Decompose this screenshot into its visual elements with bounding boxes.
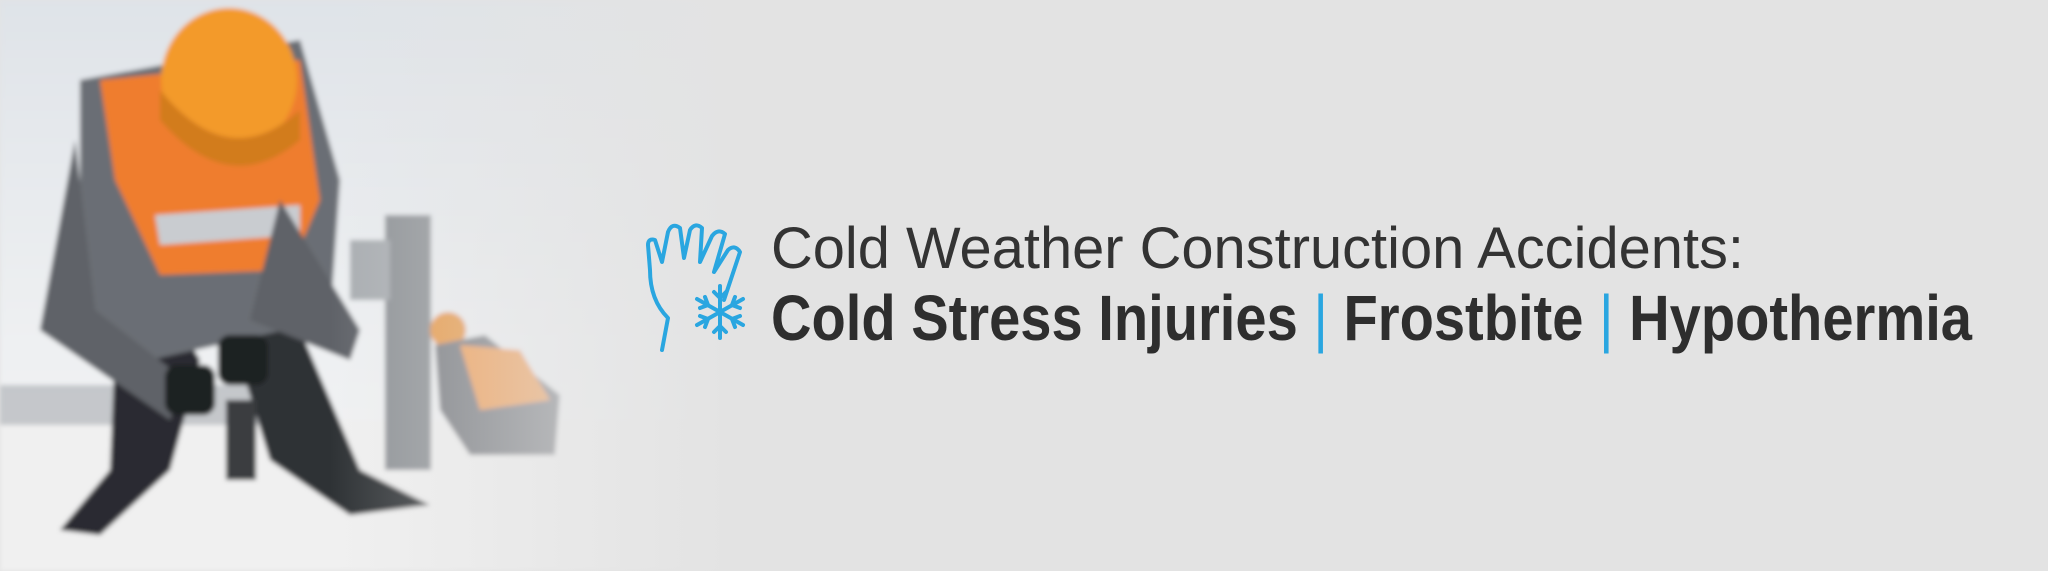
- icon: hand with snowflake: [648, 225, 743, 350]
- main worker: [40, 8, 430, 535]
- photo: construction workers: [0, 0, 720, 571]
- fade overlay: [330, 0, 730, 571]
- second worker: [430, 312, 560, 455]
- title line 2: Cold Stress Injuries | Frostbite | Hypothermia: [771, 282, 1972, 354]
- title line 1: Cold Weather Construction Accidents:: [771, 216, 1744, 281]
- guardrail post: [385, 215, 431, 470]
